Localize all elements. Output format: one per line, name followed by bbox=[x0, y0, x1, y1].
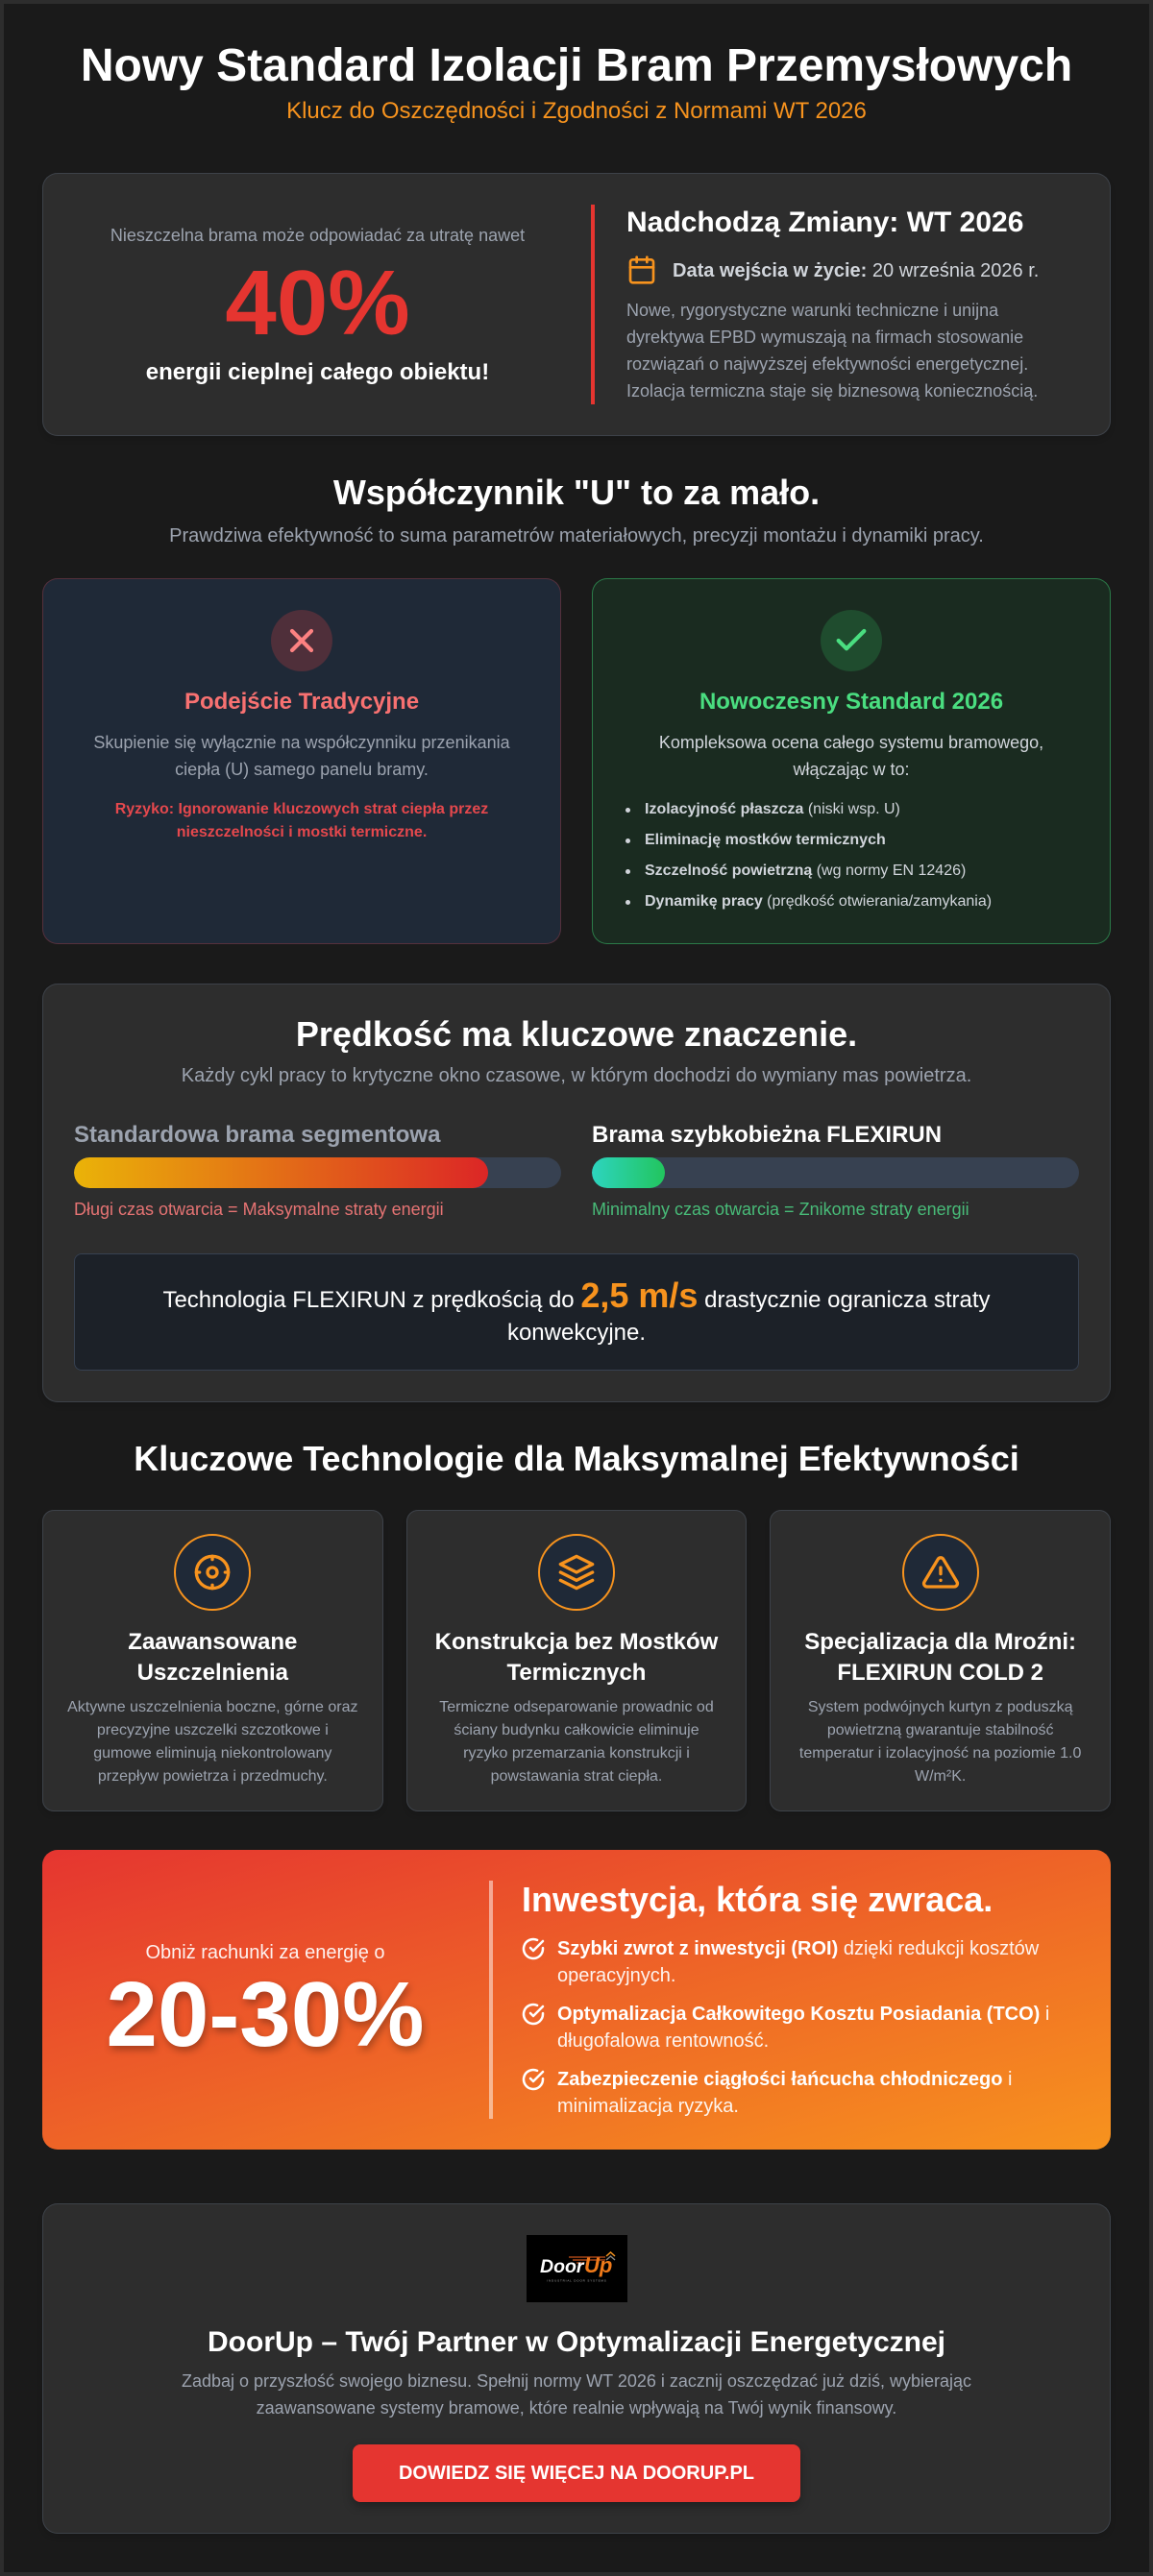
panel: modern standard bbox=[592, 578, 1111, 944]
caption: FLEXIRUN gate: Minimalny czas otwarcia = Znikome straty energii bbox=[592, 1200, 969, 1219]
label: standard gate: Standardowa brama segmentowa bbox=[74, 1122, 440, 1148]
text: seals: gumowe eliminują niekontrolowany bbox=[93, 1745, 331, 1762]
button: learn more bbox=[353, 2444, 800, 2502]
panel: 40% energy loss and WT 2026 bbox=[42, 173, 1111, 436]
text: cold storage: temperatur i izolacyjność na poziomie 1.0 bbox=[799, 1745, 1081, 1762]
label: FLEXIRUN gate: Brama szybkobieżna FLEXIRUN bbox=[592, 1122, 942, 1148]
panel: speed comparison bbox=[42, 984, 1111, 1402]
text: risk bbox=[115, 801, 488, 840]
text: risk: Ryzyko: Ignorowanie kluczowych strat ciepła przez bbox=[115, 801, 488, 817]
text: cold storage: System podwójnych kurtyn z poduszką bbox=[808, 1699, 1072, 1715]
heading: key technologies: Kluczowe Technologie dla Maksymalnej Efektywności bbox=[134, 1439, 1019, 1478]
icon: check circle 1 bbox=[523, 1938, 544, 1959]
text: WT 2026 description: Izolacja termiczna staje się biznesową koniecznością. bbox=[626, 381, 1038, 401]
icon: check bbox=[821, 610, 882, 671]
heading: thermal bridges: Termicznych bbox=[507, 1660, 646, 1686]
text: call to action bbox=[182, 2371, 971, 2418]
text: traditional description: Skupienie się wyłącznie na współczynniku przenikania bbox=[93, 733, 510, 752]
icon: warning triangle bbox=[902, 1534, 979, 1611]
text: seals: precyzyjne uszczelki szczotkowe i bbox=[97, 1722, 329, 1738]
heading: DoorUp partner: DoorUp – Twój Partner w Optymalizacji Energetycznej bbox=[208, 2326, 945, 2358]
text: WT 2026 description: Nowe, rygorystyczne warunki techniczne i unijna bbox=[626, 301, 998, 320]
callout: 2.5 m/s bbox=[74, 1253, 1079, 1371]
panel: cold storage bbox=[770, 1510, 1111, 1811]
subtitle: Klucz do Oszczędności i Zgodności z Normami WT 2026 bbox=[286, 98, 867, 124]
text: call to action: Zadbaj o przyszłość swojego biznesu. Spełnij normy WT 2026 i zacznij oszczędzać już dziś, wybierając bbox=[182, 2371, 971, 2391]
text: seals bbox=[67, 1699, 358, 1785]
text: ROI benefit bbox=[557, 1938, 1040, 1986]
divider: red bbox=[591, 205, 595, 404]
subheading: U coefficient: Prawdziwa efektywność to suma parametrów materiałowych, precyzji montażu i dynamiki pracy. bbox=[169, 525, 984, 547]
text: cold storage: powietrzną gwarantuje stabilność bbox=[827, 1722, 1053, 1738]
text: cold chain benefit: Zabezpieczenie ciągłości łańcucha chłodniczego i bbox=[557, 2069, 1012, 2090]
subheading: speed: Każdy cykl pracy to krytyczne okno czasowe, w którym dochodzi do wymiany mas powietrza. bbox=[182, 1065, 971, 1086]
icon: check circle 3 bbox=[523, 2069, 544, 2090]
bar: standard gate bbox=[74, 1157, 561, 1188]
text: thermal bridges: powstawania strat ciepła. bbox=[491, 1768, 662, 1785]
text: cold chain benefit: minimalizacja ryzyka. bbox=[557, 2096, 739, 2117]
list: assessed parameters bbox=[626, 801, 992, 910]
text: cold storage: W/m²K. bbox=[915, 1768, 966, 1785]
heading: traditional: Podejście Tradycyjne bbox=[184, 689, 419, 715]
text: cold storage bbox=[799, 1699, 1081, 1785]
list: assessed parameters: Eliminację mostków termicznych bbox=[645, 832, 886, 848]
text: call to action: zaawansowane systemy bramowe, które realnie wpływają na Twój wynik finansowy. bbox=[257, 2398, 896, 2418]
panel: seals bbox=[42, 1510, 383, 1811]
panel: no thermal bridges bbox=[406, 1510, 747, 1811]
heading: cold storage: Specjalizacja dla Mroźni: bbox=[804, 1629, 1076, 1655]
list: assessed parameters: Izolacyjność płaszcza (niski wsp. U) bbox=[645, 801, 900, 817]
heading: speed: Prędkość ma kluczowe znaczenie. bbox=[296, 1014, 857, 1054]
logo: DoorUp bbox=[527, 2235, 627, 2302]
text: lower bills: Obniż rachunki za energię o bbox=[145, 1942, 385, 1963]
button: learn more: DOWIEDZ SIĘ WIĘCEJ NA DOORUP.PL bbox=[399, 2463, 754, 2484]
callout: 2.5 m/s: konwekcyjne. bbox=[507, 1320, 646, 1346]
text: thermal bridges: ryzyko przemarzania konstrukcji i bbox=[463, 1745, 690, 1762]
callout: 2.5 m/s: Technologia FLEXIRUN z prędkością do 2,5 m/s drastycznie ogranicza straty bbox=[162, 1276, 991, 1315]
text: WT 2026 description: rozwiązań o najwyższej efektywności energetycznej. bbox=[626, 354, 1028, 374]
text: risk: nieszczelności i mostki termiczne. bbox=[177, 824, 427, 840]
text: energy loss intro: Nieszczelna brama może odpowiadać za utratę nawet bbox=[110, 226, 525, 245]
logo: DoorUp: Up bbox=[584, 2253, 612, 2277]
text: traditional description bbox=[93, 733, 510, 779]
heading: thermal bridges: Konstrukcja bez Mostków bbox=[435, 1629, 718, 1655]
text: TCO benefit: Optymalizacja Całkowitego Kosztu Posiadania (TCO) i bbox=[557, 2004, 1049, 2025]
caption: standard gate: Długi czas otwarcia = Maksymalne straty energii bbox=[74, 1200, 444, 1219]
list: assessed parameters: Szczelność powietrzną (wg normy EN 12426) bbox=[645, 863, 966, 879]
heading: cold storage bbox=[804, 1629, 1076, 1686]
text: modern description bbox=[659, 733, 1043, 779]
logo: DoorUp: Door bbox=[540, 2256, 585, 2277]
heading: seals: Zaawansowane bbox=[128, 1629, 297, 1655]
text: thermal bridges: Termiczne odseparowanie prowadnic od bbox=[439, 1699, 714, 1715]
heading: cold storage: FLEXIRUN COLD 2 bbox=[837, 1660, 1043, 1686]
heading: seals: Uszczelnienia bbox=[137, 1660, 288, 1686]
panel: ROI bbox=[42, 1850, 1111, 2150]
icon: calendar bbox=[628, 255, 655, 284]
text: energy loss outro: energii cieplnej całego obiektu! bbox=[146, 359, 489, 385]
heading: thermal bridges bbox=[435, 1629, 719, 1686]
heading: modern: Nowoczesny Standard 2026 bbox=[699, 689, 1003, 715]
stat: 20-30%: 20-30% bbox=[107, 1963, 424, 2066]
icon: cross bbox=[271, 610, 332, 671]
stat: 40%: 40% bbox=[225, 252, 410, 354]
logo: DoorUp: INDUSTRIAL DOOR SYSTEMS bbox=[547, 2278, 607, 2282]
text: seals: Aktywne uszczelnienia boczne, górne oraz bbox=[67, 1699, 358, 1715]
heading: U coefficient: Współczynnik "U" to za mało. bbox=[333, 473, 820, 512]
icon: check circle 2 bbox=[523, 2004, 544, 2025]
divider: white bbox=[489, 1881, 493, 2119]
text: TCO benefit: długofalowa rentowność. bbox=[557, 2030, 769, 2052]
text: WT 2026 description: dyrektywa EPBD wymuszają na firmach stosowanie bbox=[626, 328, 1023, 347]
heading: investment: Inwestycja, która się zwraca. bbox=[522, 1880, 993, 1919]
text: WT 2026 description bbox=[626, 301, 1038, 401]
heading: WT 2026: Nadchodzą Zmiany: WT 2026 bbox=[626, 207, 1023, 238]
text: thermal bridges bbox=[439, 1699, 714, 1785]
icon: layers bbox=[538, 1534, 615, 1611]
panel: call to action bbox=[42, 2203, 1111, 2534]
text: modern description: włączając w to: bbox=[793, 760, 910, 779]
text: ROI benefit: Szybki zwrot z inwestycji (ROI) dzięki redukcji kosztów bbox=[557, 1938, 1039, 1959]
text: cold chain benefit bbox=[557, 2069, 1012, 2117]
text: seals: przepływ powietrza i przedmuchy. bbox=[98, 1768, 328, 1785]
text: modern description: Kompleksowa ocena całego systemu bramowego, bbox=[659, 733, 1043, 752]
panel: traditional approach bbox=[42, 578, 561, 944]
text: traditional description: ciepła (U) samego panelu bramy. bbox=[175, 760, 429, 779]
heading: seals bbox=[128, 1629, 297, 1686]
text: ROI benefit: operacyjnych. bbox=[557, 1965, 675, 1986]
title: Nowy Standard Izolacji Bram Przemysłowych bbox=[81, 40, 1072, 91]
bar: FLEXIRUN gate bbox=[592, 1157, 1079, 1188]
list: assessed parameters: Dynamikę pracy (prędkość otwierania/zamykania) bbox=[645, 893, 992, 910]
text: TCO benefit bbox=[557, 2004, 1049, 2052]
text: thermal bridges: ściany budynku całkowicie eliminuje bbox=[454, 1722, 699, 1738]
text: effective date: Data wejścia w życie: 20 września 2026 r. bbox=[673, 260, 1039, 281]
icon: target bbox=[174, 1534, 251, 1611]
